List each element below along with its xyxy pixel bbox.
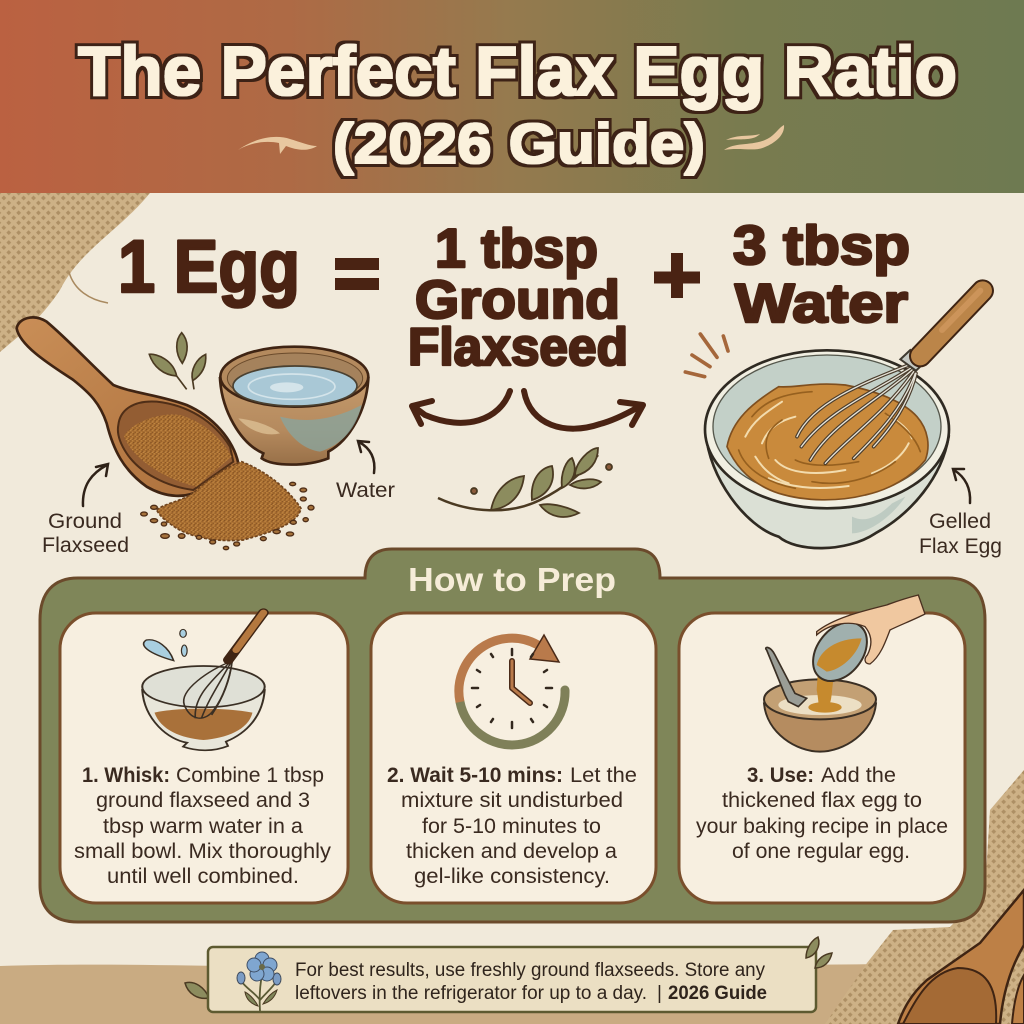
scattered seeds <box>141 482 314 550</box>
water <box>233 366 357 406</box>
label: gelled flax egg <box>919 469 1002 558</box>
text: step 2: for 5-10 minutes to <box>422 815 601 838</box>
leaves: footer right <box>806 937 832 968</box>
label: water: Water <box>336 479 395 502</box>
equation: 1 Egg: 1 Egg <box>118 225 300 308</box>
icon: whisk in bowl <box>142 613 265 750</box>
text: step 1: 1. Whisk: <box>82 764 170 787</box>
equation: 1 tbsp ground flaxseed: Flaxseed <box>408 318 628 377</box>
equation: 1 tbsp ground flaxseed: Ground <box>415 270 620 330</box>
label: gelled flax egg: Gelled <box>929 510 991 533</box>
text: step 3: Add the <box>821 764 896 787</box>
flaxseed pile <box>157 462 301 541</box>
bowl body <box>706 433 949 548</box>
header band <box>0 0 1024 193</box>
label: ground flaxseed <box>42 464 129 557</box>
illustration: three leaves <box>149 333 206 389</box>
equation: 3 tbsp water: 3 tbsp <box>733 214 910 276</box>
ratio equation <box>118 214 910 377</box>
equals sign <box>335 258 379 290</box>
arrow: water <box>358 441 374 473</box>
arrow: ground flaxseed <box>83 464 108 506</box>
tip text: For best results, use freshly ground flaxseeds. Store any <box>295 960 765 981</box>
burlap thread <box>69 272 108 303</box>
heading: How to Prep <box>408 561 616 598</box>
panel background with tab <box>40 549 985 922</box>
equation: 1 tbsp ground flaxseed: 1 tbsp <box>435 217 598 279</box>
wooden spoons: bottom right <box>898 890 1024 1024</box>
bowl body <box>220 378 368 465</box>
tip text: 2026 Guide <box>668 983 767 1004</box>
tip text <box>295 960 767 1004</box>
text: step 2: Let the <box>570 764 637 787</box>
icon: pouring flax egg into bowl <box>764 595 925 752</box>
text: step 1: small bowl. Mix thoroughly <box>74 840 332 863</box>
tip text: | <box>657 983 662 1004</box>
arrow: gelled flax egg <box>953 469 970 503</box>
leaf: footer left <box>185 982 209 998</box>
text: step 3: of one regular egg. <box>732 840 910 863</box>
text: step 3: 3. Use: <box>747 764 814 787</box>
text: step 3: your baking recipe in place <box>696 815 948 838</box>
subtitle: (2026 Guide) <box>333 112 705 176</box>
text: step 2 <box>387 764 637 888</box>
scoop <box>17 317 238 496</box>
card: wait step <box>371 613 656 903</box>
whisk wires <box>797 365 916 463</box>
plus sign <box>654 253 700 298</box>
illustration: olive sprig <box>438 448 612 517</box>
equation: 3 tbsp water: Water <box>735 272 908 334</box>
icon: blue flax flower <box>237 952 281 1011</box>
arrow: right curved <box>524 391 643 429</box>
panel: how to prep <box>40 549 985 922</box>
bowl rim <box>705 350 949 508</box>
burlap corner: top left <box>0 193 150 352</box>
text: step 2: 2. Wait 5-10 mins: <box>387 764 563 787</box>
label: gelled flax egg: Flax Egg <box>919 535 1002 558</box>
equation: 3 tbsp water <box>733 214 910 334</box>
text: step 3: thickened flax egg to <box>722 789 922 812</box>
title: The Perfect Flax Egg Ratio <box>78 32 957 110</box>
kraft paper band <box>0 962 1024 1024</box>
tip text: leftovers in the refrigerator for up to a day. <box>295 983 647 1004</box>
arrow: left curved <box>412 391 510 424</box>
equation: 1 tbsp ground flaxseed <box>408 217 628 377</box>
gel mixture <box>727 384 928 500</box>
label: ground flaxseed: Ground <box>48 510 122 533</box>
illustration: bowl of gelled flax egg with whisk <box>685 291 983 548</box>
banner box <box>208 947 816 1012</box>
label: ground flaxseed: Flaxseed <box>42 534 129 557</box>
whisk ferrule <box>900 350 925 371</box>
text: step 1 <box>74 764 332 888</box>
card: use step <box>679 595 965 903</box>
text: step 2: thicken and develop a <box>406 840 617 863</box>
motion lines <box>685 334 728 377</box>
illustration: bowl of water <box>220 347 368 465</box>
gel swirls <box>745 402 912 488</box>
flaxseed in scoop <box>124 414 232 487</box>
icon: clock with arrow <box>459 635 565 745</box>
text: step 1: Combine 1 tbsp <box>176 764 324 787</box>
text: step 2: gel-like consistency. <box>414 865 610 888</box>
swash: left <box>238 137 317 154</box>
text: step 3 <box>696 764 948 863</box>
text: step 2: mixture sit undisturbed <box>401 789 623 812</box>
whisk handle <box>920 291 983 356</box>
illustration: wooden scoop with ground flaxseed <box>17 317 314 550</box>
swash: right <box>724 125 784 150</box>
label: water <box>336 441 395 502</box>
card: whisk step <box>60 613 348 903</box>
bowl rim <box>220 347 368 407</box>
burlap corner: bottom right <box>825 770 1024 1024</box>
text: step 1: until well combined. <box>107 865 299 888</box>
text: step 1: ground flaxseed and 3 <box>96 789 310 812</box>
footer tip banner <box>185 937 832 1012</box>
text: step 1: tbsp warm water in a <box>103 815 303 838</box>
